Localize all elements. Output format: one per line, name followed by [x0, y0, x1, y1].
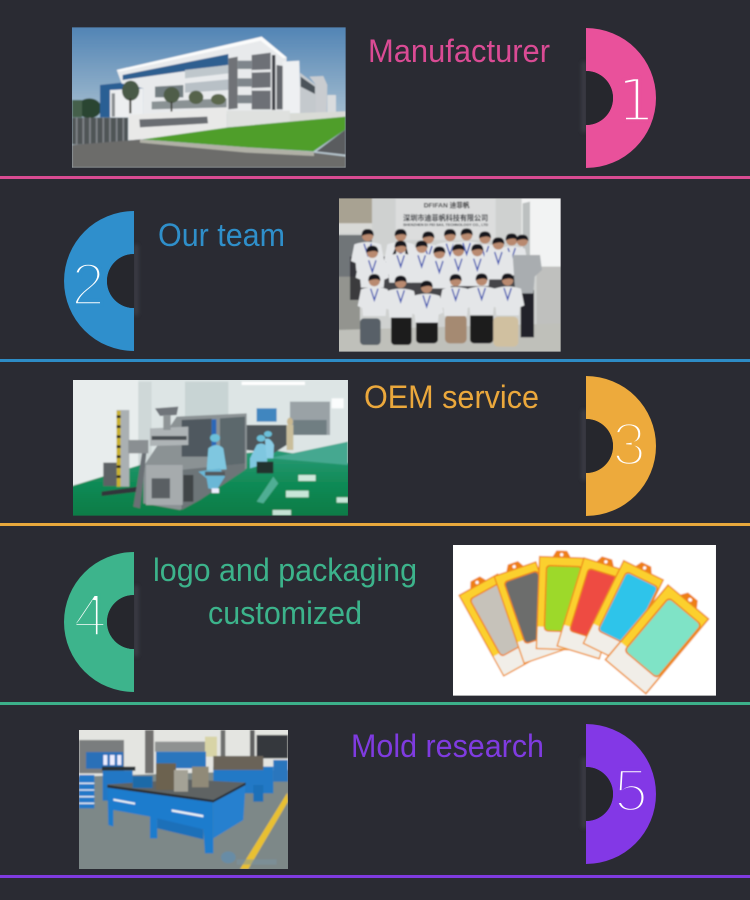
number badge 1 — [582, 28, 656, 168]
number badge 3: 3 — [612, 411, 646, 478]
number badge 4: 4 — [73, 582, 107, 649]
heading: Mold research: Mold research — [351, 728, 544, 764]
divider — [0, 359, 750, 362]
section 5: mold research — [0, 724, 750, 878]
number badge 4 — [64, 552, 138, 692]
divider — [0, 523, 750, 526]
section 3: OEM service — [0, 376, 750, 526]
heading: OEM service: OEM service — [364, 379, 539, 415]
heading: Manufacturer: Manufacturer — [368, 33, 550, 69]
number badge 1: 1 — [617, 66, 655, 136]
number badge 5 — [582, 724, 656, 864]
section 1: manufacturer — [0, 25, 750, 179]
divider — [0, 875, 750, 878]
divider — [0, 702, 750, 705]
photo: mold workshop — [77, 727, 291, 871]
heading: logo and packaging customized: customized — [208, 595, 362, 631]
heading: Our team: Our team — [158, 217, 285, 253]
divider — [0, 176, 750, 179]
photo: phone case packaging — [452, 543, 718, 697]
number badge 3 — [582, 376, 656, 516]
photo: clean-room production line — [70, 377, 351, 518]
section 4: logo and packaging — [0, 543, 750, 705]
photo: team group — [337, 196, 563, 354]
number badge 2 — [64, 211, 138, 351]
photo: factory building — [70, 25, 348, 170]
photo: team group: SHENZHEN DI FEI SAIL TECHNOLOGY CO., LTD — [403, 223, 489, 227]
photo: team group: DFIFAN 迪菲帆 — [424, 200, 470, 209]
heading: logo and packaging customized — [153, 552, 417, 631]
number badge 5: 5 — [614, 757, 648, 824]
heading: logo and packaging customized: logo and packaging — [153, 552, 417, 588]
section 2: our team — [0, 196, 750, 362]
number badge 2: 2 — [71, 251, 105, 318]
photo: team group: 深圳市迪菲帆科技有限公司 — [403, 214, 488, 223]
